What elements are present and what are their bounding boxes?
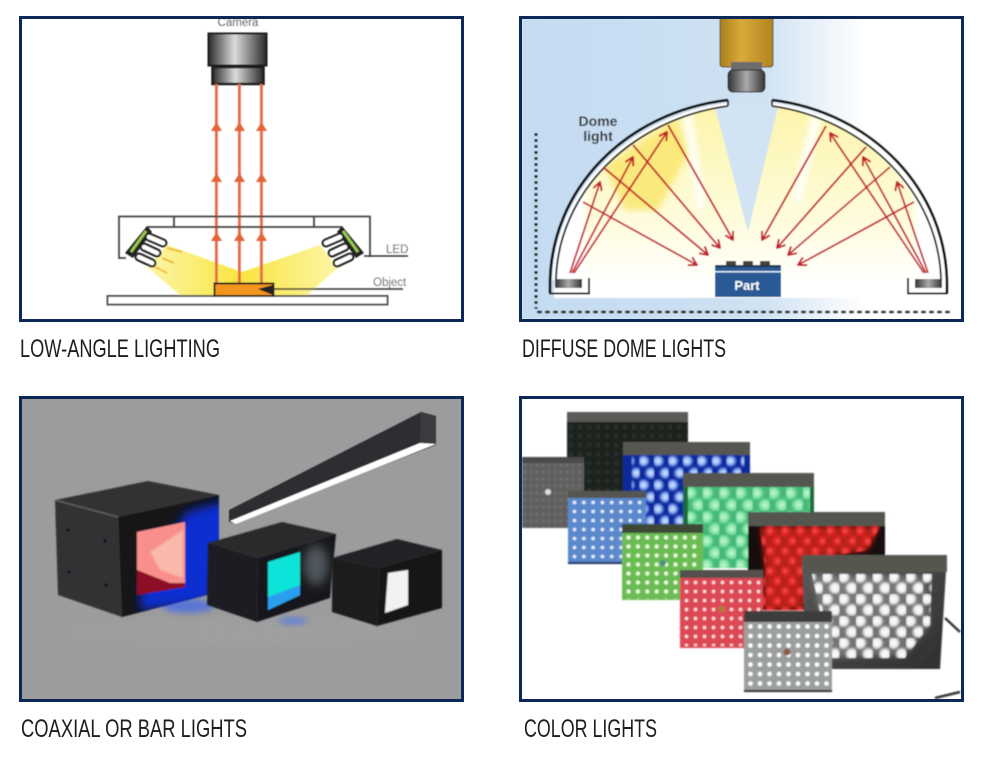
small red panel — [680, 570, 763, 648]
panel: color lights — [520, 398, 962, 700]
label: Dome light — [579, 113, 618, 144]
panel: coaxial or bar lights — [20, 398, 462, 700]
caption: coaxial or bar lights: COAXIAL OR BAR LIGHTS — [21, 715, 247, 743]
power cables — [935, 618, 960, 698]
panel: diffuse dome lights — [520, 15, 962, 320]
yellow light beams — [147, 245, 338, 295]
part block: Part — [734, 278, 760, 293]
blue background gradient — [522, 19, 961, 319]
reflected light rays with arrows — [211, 84, 267, 284]
dashed floor line — [537, 311, 950, 313]
large white panel — [802, 555, 947, 669]
part block — [715, 261, 781, 297]
icon: linear bar light — [229, 412, 436, 524]
left lamp — [549, 278, 589, 294]
right lamp — [908, 278, 948, 294]
icon: small coaxial light — [332, 539, 442, 626]
large blue panel — [623, 442, 750, 525]
label: Dome light: Dome — [579, 113, 618, 129]
object — [214, 284, 274, 296]
LED leader line and label — [364, 244, 408, 256]
small blue panel — [568, 491, 646, 564]
Object leader line and label: Object — [373, 277, 407, 289]
LED fixture right — [326, 226, 364, 263]
LED leader line and label: LED — [386, 244, 408, 256]
small green panel — [622, 524, 703, 600]
Object leader line and label — [273, 277, 407, 289]
icon: medium coaxial light — [207, 522, 336, 622]
lighting housing — [119, 216, 370, 258]
unlit dark panel — [567, 412, 688, 497]
icon: camera — [720, 15, 773, 92]
panel: low-angle lighting — [20, 17, 462, 320]
label: Dome light: light — [583, 128, 613, 144]
unlit gray panel — [522, 457, 584, 528]
large red panel — [748, 512, 885, 610]
dotted enclosure outline — [534, 133, 538, 309]
caption: color lights: COLOR LIGHTS — [524, 715, 657, 743]
soft floor glow — [160, 597, 308, 628]
red reflected-light arrows — [570, 125, 928, 273]
caption: diffuse dome lights: DIFFUSE DOME LIGHTS — [522, 335, 726, 363]
label: Camera: Camera — [218, 17, 259, 29]
dome shell — [550, 100, 947, 293]
table surface — [108, 296, 388, 304]
LED fixture left — [125, 226, 182, 273]
caption: low-angle lighting: LOW-ANGLE LIGHTING — [20, 335, 220, 363]
large green panel — [683, 473, 814, 568]
dome interior glow — [554, 104, 918, 298]
icon: camera — [208, 34, 266, 84]
icon: large coaxial light — [55, 481, 230, 617]
small white panel — [744, 611, 832, 692]
